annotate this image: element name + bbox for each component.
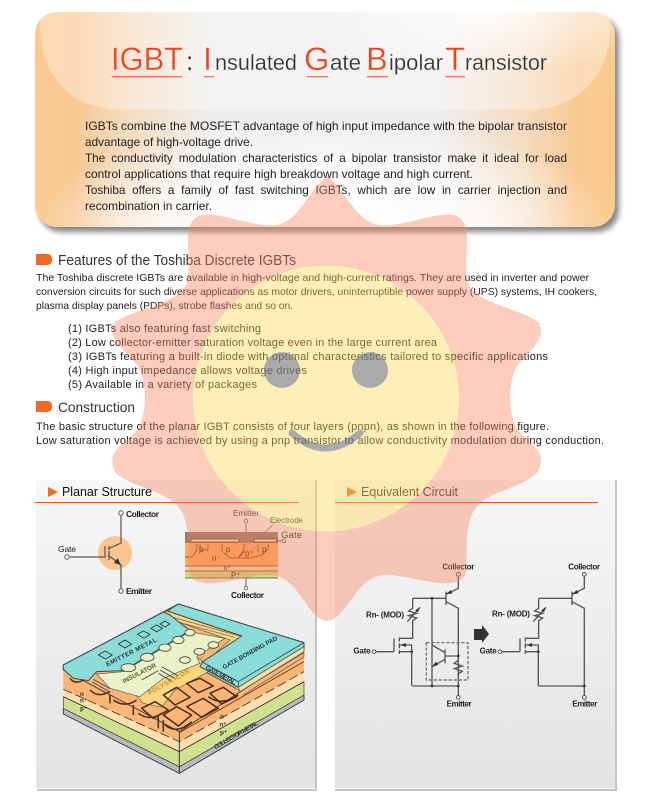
section: construction bbox=[36, 399, 604, 447]
intro text: The conductivity modulation characteristics of a bipolar transistor make it ideal for load bbox=[85, 151, 567, 165]
3D planar IGBT illustration: p⁺ bbox=[80, 706, 87, 713]
circuit: full equivalent: Emitter bbox=[447, 700, 472, 709]
cross section diagram: Collector bbox=[231, 590, 265, 600]
title: IGBT bbox=[111, 41, 183, 77]
IGBT symbol: Emitter bbox=[126, 586, 153, 596]
title: nsulated bbox=[215, 50, 297, 75]
features description: The Toshiba discrete IGBTs are available in high-voltage and high-current ratings. They are used in inverter and power bbox=[36, 272, 590, 284]
intro text: advantage of high-voltage drive. bbox=[85, 135, 253, 149]
panel heading: equivalent circuit bbox=[335, 485, 598, 502]
panel: equivalent circuit bbox=[335, 480, 616, 790]
cross section diagram: p bbox=[199, 545, 204, 554]
icon: block arrow bbox=[474, 625, 489, 643]
construction description: Low saturation voltage is achieved by using a pnp transistor to allow conductivity modulation during conduction. bbox=[36, 435, 604, 447]
features description bbox=[36, 272, 597, 312]
3D planar IGBT illustration: p⁺ bbox=[220, 729, 227, 736]
title: ipolar bbox=[389, 50, 443, 75]
3D planar IGBT illustration: n⁺ bbox=[80, 698, 87, 705]
circuit: full equivalent: Gate bbox=[353, 646, 371, 655]
intro text: control applications that require high breakdown voltage and high current. bbox=[85, 167, 473, 181]
cross section diagram: p⁺ bbox=[245, 549, 254, 558]
3D planar IGBT illustration: GATE BONDING PAD bbox=[222, 635, 279, 671]
title bbox=[111, 41, 547, 77]
features description: conversion circuits for such diverse applications as motor drivers, uninterruptible power supply (UPS) systems, IH cookers, bbox=[36, 286, 597, 298]
panel: header box bbox=[35, 12, 619, 232]
panel heading: planar structure: Planar Structure bbox=[62, 485, 152, 499]
cross section diagram: Electrode bbox=[270, 516, 304, 525]
features list: (3) IGBTs featuring a built-in diode with optimal characteristics tailored to specific applications bbox=[68, 351, 548, 363]
construction description bbox=[36, 421, 604, 447]
title: T bbox=[445, 41, 465, 77]
panel heading: equivalent circuit: Equivalent Circuit bbox=[361, 485, 459, 499]
title: ransistor bbox=[465, 50, 547, 75]
circuit: full equivalent: Rn- (MOD) bbox=[366, 611, 404, 620]
title: I bbox=[203, 41, 212, 77]
IGBT symbol: Collector bbox=[126, 509, 160, 519]
circuit: simplified equivalent: Emitter bbox=[572, 700, 597, 709]
section: features bbox=[36, 253, 597, 391]
intro text: recombination in carrier. bbox=[85, 199, 212, 213]
cross section diagram: P⁺ bbox=[231, 571, 241, 580]
circuit: simplified equivalent: Gate bbox=[480, 646, 497, 655]
features list: (4) High input impedance allows voltage drives bbox=[68, 365, 308, 377]
cross section diagram: n⁺ bbox=[224, 565, 231, 572]
circuit: full equivalent bbox=[353, 562, 474, 709]
heading: features: Features of the Toshiba Discrete IGBTs bbox=[58, 253, 296, 269]
3D planar IGBT illustration: GATE METAL bbox=[204, 665, 237, 686]
circuit: full equivalent: Collector bbox=[442, 562, 474, 571]
3D planar IGBT illustration bbox=[63, 604, 304, 773]
features list: (1) IGBTs also featuring fast switching bbox=[68, 323, 261, 335]
IGBT symbol bbox=[58, 509, 160, 596]
cross section diagram: Gate bbox=[281, 530, 302, 541]
3D planar IGBT illustration: n⁺ bbox=[219, 722, 227, 729]
cross section diagram bbox=[185, 509, 304, 600]
3D planar IGBT illustration: n bbox=[220, 713, 224, 720]
cross section diagram: p bbox=[226, 545, 231, 554]
intro text: Toshiba offers a family of fast switching IGBTs, which are low in carrier injection and bbox=[85, 183, 567, 197]
3D planar IGBT illustration: n bbox=[80, 691, 84, 698]
intro text bbox=[85, 119, 567, 213]
IGBT symbol: Gate bbox=[58, 544, 76, 554]
heading: construction: Construction bbox=[58, 399, 135, 415]
circuit: simplified equivalent: Collector bbox=[568, 562, 600, 571]
3D planar IGBT illustration: EMITTER METAL bbox=[105, 637, 158, 668]
cross section diagram: Emitter bbox=[233, 509, 259, 518]
circuit: simplified equivalent bbox=[480, 562, 600, 709]
cross section diagram: p bbox=[262, 545, 267, 554]
icon: features bullet bbox=[36, 254, 52, 265]
sun smiley overlay bbox=[112, 176, 541, 621]
construction description: The basic structure of the planar IGBT consists of four layers (pnpn), as shown in the following figure. bbox=[36, 421, 549, 433]
title: G bbox=[304, 41, 329, 77]
features list: (5) Available in a variety of packages bbox=[68, 379, 258, 391]
features list bbox=[68, 323, 548, 391]
title: ate bbox=[330, 50, 361, 75]
panel heading: planar structure bbox=[35, 485, 299, 502]
3D planar IGBT illustration: POLYSILICON bbox=[147, 668, 191, 697]
circuit: simplified equivalent: Rn- (MOD) bbox=[492, 610, 530, 619]
intro text: IGBTs combine the MOSFET advantage of high input impedance with the bipolar transistor bbox=[85, 119, 567, 133]
3D planar IGBT illustration: INSULATOR bbox=[122, 662, 158, 685]
features list: (2) Low collector-emitter saturation voltage even in the large current area bbox=[68, 337, 438, 349]
panel: planar structure bbox=[35, 480, 316, 790]
title: : bbox=[186, 46, 193, 76]
title: B bbox=[366, 41, 388, 77]
3D planar IGBT illustration: COLLECTOR METAL bbox=[213, 720, 260, 751]
icon: construction bullet bbox=[36, 401, 52, 412]
cross section diagram: n⁻ bbox=[212, 554, 221, 563]
features description: plasma display panels (PDPs), strobe flashes and so on. bbox=[36, 300, 293, 312]
